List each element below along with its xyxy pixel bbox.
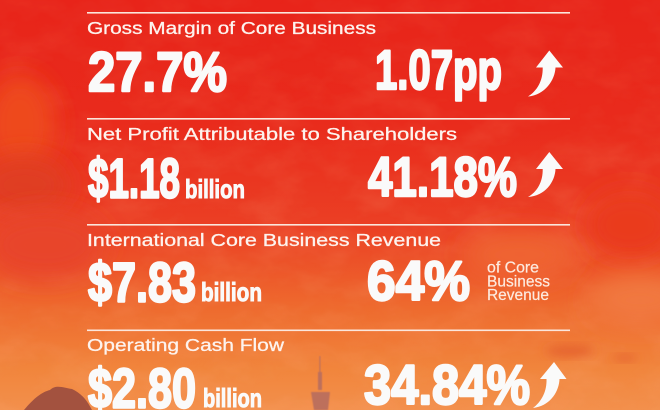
icon: up arrow [528,50,563,96]
panel: net profit [87,124,563,210]
change: 1.07pp: 1.07pp [375,38,502,101]
note: of core business revenue: of Core [487,260,539,276]
mountain silhouette [24,387,92,410]
panel: international revenue [87,230,550,314]
value: 27.7%: 27.7% [88,40,227,103]
heading: international revenue: International Core Business Revenue [87,230,441,250]
panel: net profit: billion [185,174,245,204]
heading: gross margin: Gross Margin of Core Business [87,18,376,38]
panel: gross margin [87,18,563,103]
note: of core business revenue: Business [487,274,550,290]
value: 64%: 64% [367,249,470,312]
note: of core business revenue [487,260,550,304]
panel: operating cash flow [87,335,566,410]
value: $1.18 billion: $1.18 [88,146,180,210]
change: 41.18%: 41.18% [368,145,517,208]
heading: operating cash flow: Operating Cash Flow [87,335,284,355]
icon: Canton Tower [311,356,330,410]
note: of core business revenue: Revenue [487,287,549,304]
icon: up arrow [533,362,566,408]
value: $7.83 billion: $7.83 [88,250,196,314]
divider rules [87,12,570,331]
panel: international revenue: billion [201,277,262,307]
heading: net profit: Net Profit Attributable to Shareholders [87,124,457,144]
icon: up arrow [528,152,563,197]
